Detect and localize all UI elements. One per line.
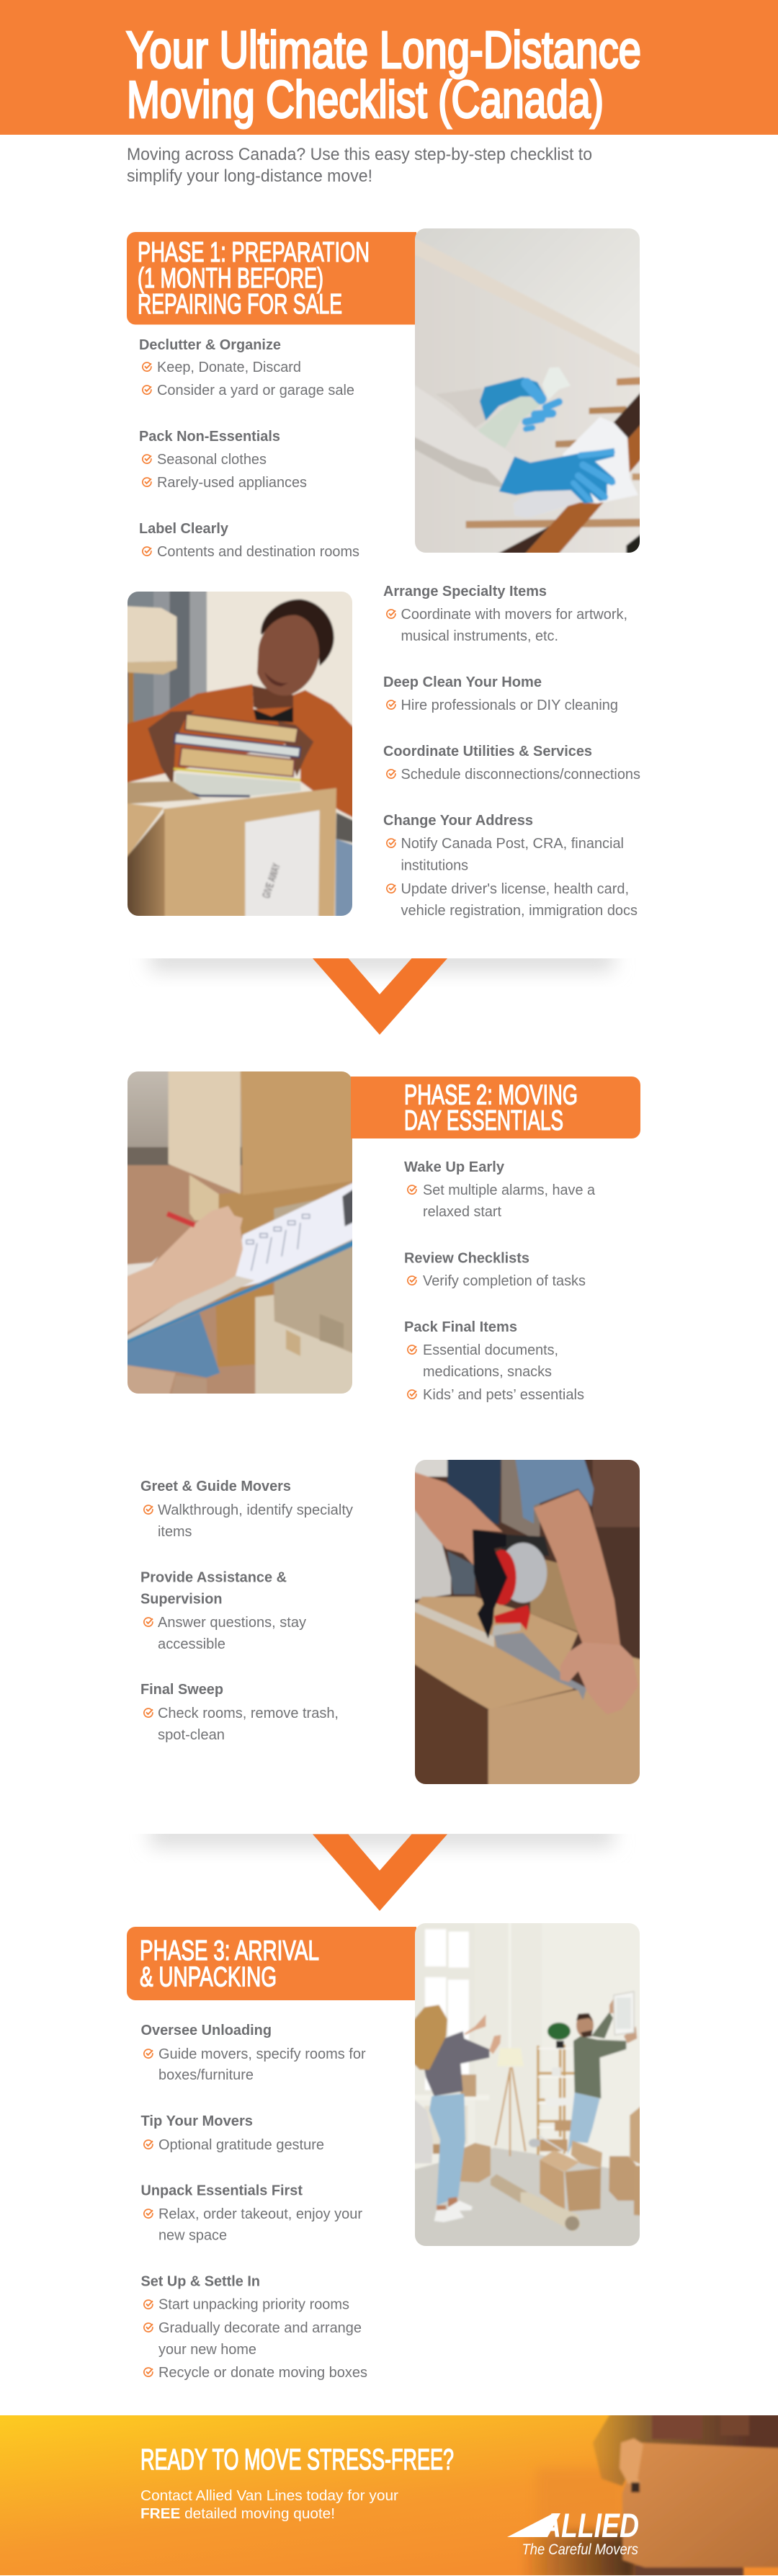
- checklist: oversee unloading: Guide movers, specify rooms for: [158, 2046, 366, 2062]
- header banner: [0, 0, 778, 135]
- checklist: declutter and organize: Consider a yard or garage sale: [157, 383, 354, 398]
- checklist: arrange specialty items: [383, 584, 627, 644]
- photo: gloved hands cleaning a banister: [410, 223, 645, 558]
- footer text: FREE detailed moving quote!: [140, 2505, 335, 2522]
- checklist: greet and guide movers: Walkthrough, identify specialty: [158, 1502, 353, 1518]
- checklist: review checklists: Review Checklists: [404, 1251, 529, 1267]
- checklist: review checklists: [404, 1251, 586, 1289]
- photo: man taping a cardboard box: [410, 1455, 645, 1789]
- title: [126, 21, 641, 129]
- checklist: tip your movers: Tip Your Movers: [141, 2113, 253, 2129]
- checklist: label clearly: Contents and destination rooms: [157, 544, 359, 560]
- checklist: arrange specialty items: Coordinate with movers for artwork,: [401, 607, 627, 623]
- checklist: oversee unloading: [141, 2023, 366, 2083]
- logo: Allied The Careful Movers: [507, 2506, 639, 2558]
- checklist: deep clean your home: [383, 674, 618, 713]
- checklist: set up and settle in: Set Up & Settle In: [141, 2274, 260, 2290]
- checklist: pack final items: Pack Final Items: [404, 1319, 517, 1335]
- checklist: pack final items: [404, 1319, 584, 1403]
- checklist: oversee unloading: boxes/furniture: [158, 2067, 254, 2083]
- photo: woman packing books in a box: [122, 587, 357, 921]
- checklist: set up and settle in: [141, 2274, 367, 2381]
- checklist: final sweep: Check rooms, remove trash,: [158, 1706, 339, 1721]
- checklist: label clearly: Label Clearly: [139, 521, 229, 537]
- checklist: greet and guide movers: Greet & Guide Movers: [140, 1479, 291, 1494]
- title: Your Ultimate Long-Distance: [126, 21, 641, 79]
- checklist: coordinate utilities and services: Schedule disconnections/connections: [401, 767, 640, 783]
- checklist: review checklists: Verify completion of tasks: [423, 1273, 586, 1289]
- checklist: provide assistance and supervision: Supervision: [140, 1591, 222, 1607]
- phase 2 heading banner: DAY ESSENTIALS: [404, 1105, 563, 1136]
- panel: phase 1 preparation: [122, 223, 645, 921]
- logo: Allied The Careful Movers: ALLIED: [541, 2506, 639, 2544]
- phase 2 heading banner: PHASE 2: MOVING: [404, 1079, 578, 1111]
- checklist: final sweep: Final Sweep: [140, 1682, 223, 1698]
- checklist: greet and guide movers: items: [158, 1524, 192, 1540]
- footer text: [140, 2487, 398, 2522]
- footer text: Contact Allied Van Lines today for your: [140, 2487, 398, 2504]
- checklist: coordinate utilities and services: [383, 744, 640, 783]
- checklist: pack non-essentials: [139, 429, 307, 491]
- checklist: change your address: Update driver's license, health card,: [401, 881, 629, 897]
- checklist: declutter and organize: Keep, Donate, Discard: [157, 360, 301, 375]
- checklist: arrange specialty items: Arrange Specialty Items: [383, 584, 547, 600]
- photo: hand writing on a clipboard among boxes: [122, 1066, 357, 1399]
- checklist: pack final items: Essential documents,: [423, 1342, 558, 1358]
- phase 1 heading banner: [127, 232, 416, 324]
- checklist: change your address: Notify Canada Post, CRA, financial: [401, 836, 624, 852]
- checklist: deep clean your home: Hire professionals or DIY cleaning: [401, 698, 618, 713]
- checklist: label clearly: [139, 521, 359, 560]
- checklist: coordinate utilities and services: Coordinate Utilities & Services: [383, 744, 592, 759]
- phase 3 heading banner: [127, 1927, 416, 2000]
- phase 1 heading banner: REPAIRING FOR SALE: [138, 289, 342, 320]
- panel: phase 2 moving day essentials: [122, 1066, 645, 1789]
- panel: phase 3 arrival and unpacking: [127, 1918, 645, 2381]
- checklist: provide assistance and supervision: [140, 1569, 306, 1652]
- checklist: set up and settle in: Start unpacking priority rooms: [158, 2297, 349, 2313]
- checklist: change your address: [383, 813, 638, 919]
- checklist: change your address: institutions: [401, 857, 468, 873]
- photo: couple hanging a picture among boxes: [410, 1918, 645, 2252]
- checklist: wake up early: relaxed start: [423, 1204, 501, 1220]
- intro text: [127, 145, 592, 186]
- checklist: pack final items: Kids’ and pets’ essentials: [423, 1387, 584, 1403]
- checklist: change your address: Change Your Address: [383, 813, 533, 829]
- checklist: wake up early: Wake Up Early: [404, 1159, 505, 1175]
- checklist: declutter and organize: [139, 337, 354, 398]
- checklist: set up and settle in: your new home: [158, 2342, 256, 2358]
- checklist: wake up early: [404, 1159, 596, 1220]
- title: Moving Checklist (Canada): [127, 71, 604, 129]
- checklist: wake up early: Set multiple alarms, have a: [423, 1182, 596, 1198]
- arrow: phase 1 to phase 2: [145, 958, 619, 1035]
- box label text: GIVE AWAY: [260, 862, 283, 900]
- checklist: pack final items: medications, snacks: [423, 1364, 552, 1380]
- footer call to action: [0, 2410, 778, 2576]
- checklist: unpack essentials first: [141, 2183, 362, 2244]
- checklist: provide assistance and supervision: Provide Assistance &: [140, 1569, 287, 1585]
- phase 2 heading banner: [351, 1077, 640, 1138]
- phase 1 heading banner: (1 MONTH BEFORE): [138, 263, 323, 294]
- checklist: unpack essentials first: new space: [158, 2228, 227, 2244]
- checklist: set up and settle in: Recycle or donate moving boxes: [158, 2365, 367, 2381]
- phase 1 heading banner: PHASE 1: PREPARATION: [138, 237, 370, 268]
- checklist: final sweep: spot-clean: [158, 1727, 225, 1743]
- phase 3 heading banner: & UNPACKING: [140, 1961, 277, 1993]
- checklist: oversee unloading: Oversee Unloading: [141, 2023, 272, 2038]
- checklist: provide assistance and supervision: Answer questions, stay: [158, 1615, 306, 1631]
- footer heading: READY TO MOVE STRESS-FREE?: [140, 2443, 454, 2476]
- checklist: pack non-essentials: Seasonal clothes: [157, 452, 267, 468]
- checklist: tip your movers: [141, 2113, 324, 2153]
- checklist: greet and guide movers: [140, 1479, 353, 1540]
- checklist: change your address: vehicle registration, immigration docs: [401, 903, 638, 919]
- checklist: declutter and organize: Declutter & Organize: [139, 337, 281, 353]
- phase 3 heading banner: PHASE 3: ARRIVAL: [140, 1935, 319, 1966]
- checklist: unpack essentials first: Relax, order takeout, enjoy your: [158, 2206, 362, 2222]
- checklist: deep clean your home: Deep Clean Your Home: [383, 674, 542, 690]
- checklist: tip your movers: Optional gratitude gesture: [158, 2137, 324, 2153]
- checklist: provide assistance and supervision: accessible: [158, 1636, 225, 1652]
- arrow: phase 2 to phase 3: [145, 1834, 619, 1911]
- checklist: set up and settle in: Gradually decorate and arrange: [158, 2320, 362, 2336]
- logo: Allied The Careful Movers: The Careful Movers: [522, 2541, 638, 2558]
- intro text: Moving across Canada? Use this easy step-by-step checklist to: [127, 145, 592, 164]
- checklist: arrange specialty items: musical instruments, etc.: [401, 628, 558, 644]
- checklist: unpack essentials first: Unpack Essentials First: [141, 2183, 303, 2199]
- intro text: simplify your long-distance move!: [127, 166, 372, 186]
- checklist: pack non-essentials: Pack Non-Essentials: [139, 429, 280, 445]
- checklist: final sweep: [140, 1682, 339, 1743]
- photo: mover carrying a box: [526, 2410, 778, 2576]
- checklist: pack non-essentials: Rarely-used appliances: [157, 475, 307, 491]
